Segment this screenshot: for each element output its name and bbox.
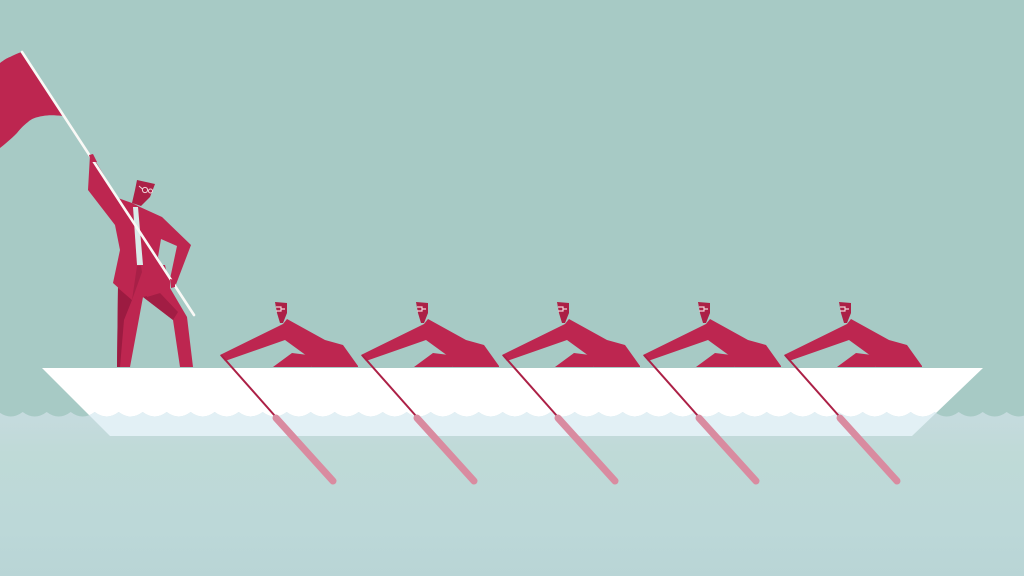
- submerged part of hull: [89, 412, 936, 436]
- glasses: [139, 186, 152, 193]
- oar shaft: [221, 355, 275, 416]
- leader figure: [88, 155, 193, 367]
- water: [0, 412, 1024, 576]
- shirt and tie: [133, 207, 143, 265]
- glasses: [276, 307, 285, 311]
- rower 2: [361, 302, 499, 481]
- legs: [117, 265, 193, 367]
- rower 3: [502, 302, 640, 481]
- knee: [273, 353, 312, 367]
- head: [132, 180, 155, 206]
- left leg shadow: [117, 288, 132, 367]
- boat hull: [42, 368, 983, 436]
- head: [275, 302, 287, 323]
- lower hand on pole: [170, 279, 175, 288]
- rower 1: [220, 302, 358, 481]
- body and arm: [220, 319, 358, 367]
- right leg shadow: [143, 293, 178, 320]
- jacket and arms: [88, 155, 191, 300]
- oar blade: [276, 418, 333, 481]
- rower 4: [643, 302, 781, 481]
- flag: [0, 52, 63, 148]
- rower 5: [784, 302, 922, 481]
- upper hand on pole: [89, 154, 97, 162]
- jacket fold: [132, 266, 142, 300]
- flag pole: [22, 52, 194, 315]
